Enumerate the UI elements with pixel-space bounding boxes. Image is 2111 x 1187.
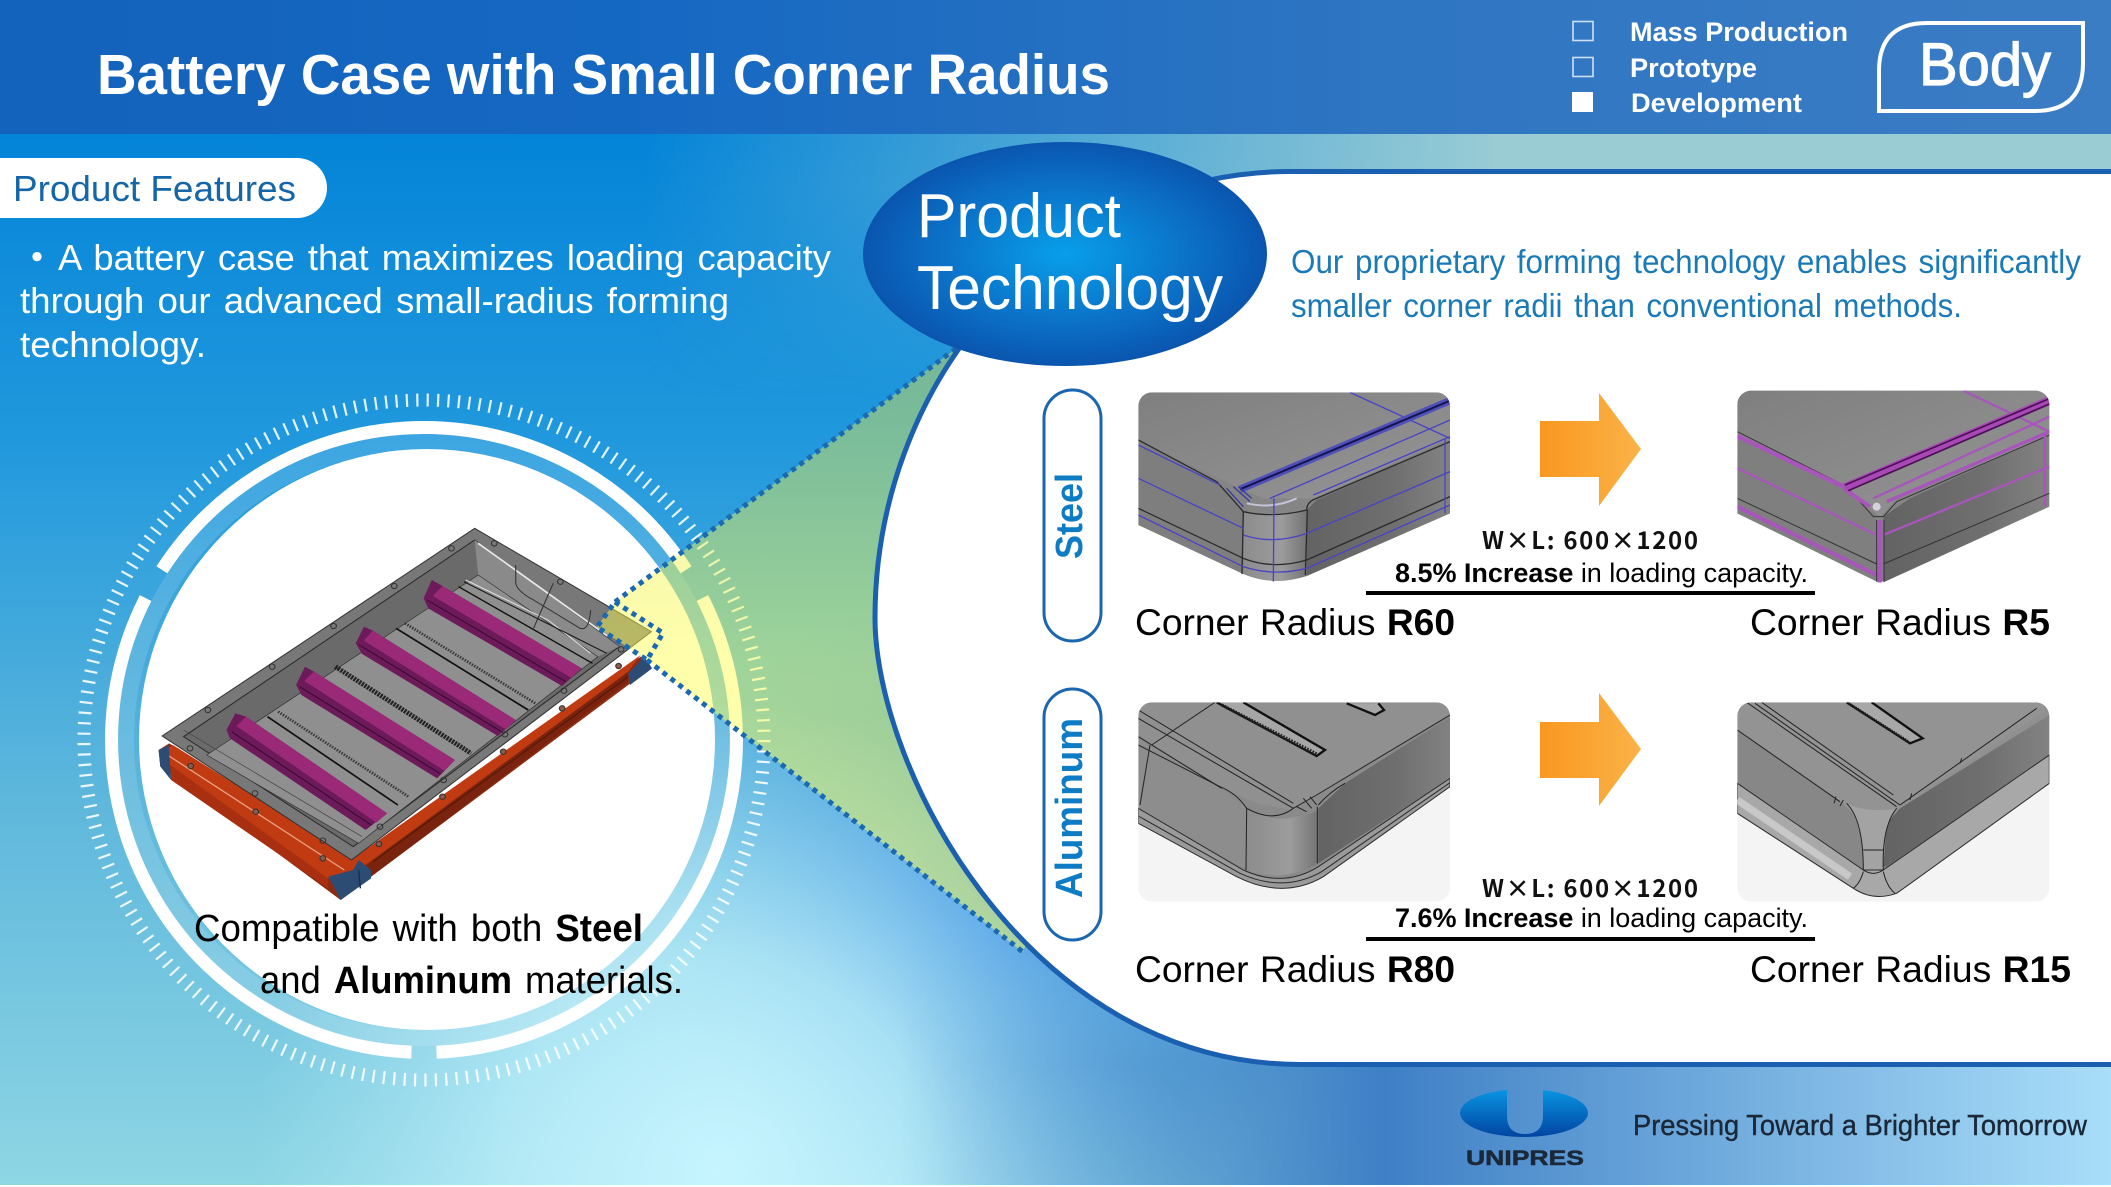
- steel label pill: [1044, 390, 1101, 641]
- zoom callout fan: [597, 347, 1150, 952]
- product technology ellipse heading: Technology: [917, 254, 1223, 323]
- product features description: A battery case that maximizes loading capacity: [58, 237, 831, 278]
- battery case illustration: [159, 528, 652, 900]
- steel radius labels: Corner Radius R60: [1135, 602, 1455, 643]
- technology description: smaller corner radii than conventional methods.: [1291, 287, 1962, 324]
- bolt holes: [187, 541, 624, 861]
- category badge: body: Body: [1919, 31, 2051, 98]
- logo: unipres: UNIPRES: [1466, 1147, 1584, 1170]
- product features description: through our advanced small-radius forming: [20, 280, 729, 321]
- steel radius labels: Corner Radius R5: [1750, 602, 2050, 643]
- panel: product technology: [875, 172, 2111, 1064]
- aluminum callout: 7.6% Increase in loading capacity.: [1395, 903, 1808, 933]
- checkbox: mass production: [1573, 22, 1593, 40]
- steel radius labels: [1135, 602, 2050, 643]
- white disc: [139, 449, 715, 1030]
- label: development: Development: [1631, 88, 1802, 118]
- white segmented ring: [112, 427, 736, 1052]
- header bar: [0, 0, 2111, 134]
- product features description: ・: [19, 237, 55, 278]
- image: steel R5 corner: [1737, 391, 2049, 582]
- aluminum radius labels: [1135, 949, 2071, 990]
- technology description: Our proprietary forming technology enables significantly: [1291, 243, 2081, 280]
- slogan: Pressing Toward a Brighter Tomorrow: [1633, 1110, 2088, 1142]
- image: aluminum R15 corner: [1737, 702, 2049, 902]
- product features pill: Product Features: [13, 168, 296, 209]
- steel callout: W×L: 600×1200: [1482, 521, 1698, 556]
- steel callout: [1366, 521, 1815, 595]
- label: mass production: Mass Production: [1630, 17, 1848, 47]
- product features description: [19, 237, 831, 365]
- technology description: [1291, 243, 2081, 324]
- product technology ellipse heading: [863, 142, 1267, 366]
- steel callout: 8.5% Increase in loading capacity.: [1395, 558, 1808, 588]
- aluminum radius labels: Corner Radius R80: [1135, 949, 1455, 990]
- compatibility caption: [194, 908, 683, 1002]
- title: Battery Case with Small Corner Radius: [97, 43, 1110, 107]
- aluminum radius labels: Corner Radius R15: [1750, 949, 2071, 990]
- checkbox: development (checked): [1572, 92, 1593, 112]
- aluminum callout: [1366, 869, 1815, 941]
- product features pill: [0, 158, 327, 218]
- arrow: aluminum improvement: [1540, 693, 1641, 806]
- aluminum label pill: Aluminum: [1049, 718, 1091, 898]
- inner tinted ring: [126, 442, 722, 1038]
- floor rails: [267, 582, 607, 805]
- steel label pill: Steel: [1049, 473, 1091, 559]
- circular emblem rings: [84, 400, 764, 1080]
- purple cross members: [226, 580, 582, 830]
- tick ring: [84, 400, 764, 1080]
- arrow: steel improvement: [1540, 393, 1641, 506]
- aluminum label pill: [1044, 689, 1101, 940]
- red lower frame: [159, 655, 652, 900]
- flange and tray walls: [162, 528, 651, 860]
- product features description: technology.: [20, 324, 206, 365]
- logo: unipres: [1460, 1088, 1588, 1170]
- category badge: body: [1879, 23, 2083, 111]
- label: prototype: Prototype: [1630, 53, 1757, 83]
- compatibility caption: and Aluminum materials.: [260, 960, 683, 1002]
- image: aluminum R80 corner: [1138, 702, 1450, 902]
- product technology ellipse heading: Product: [917, 182, 1121, 251]
- status legend: [1572, 17, 1848, 118]
- checkbox: prototype: [1573, 58, 1593, 76]
- compatibility caption: Compatible with both Steel: [194, 908, 643, 950]
- image: steel R60 corner: [1138, 392, 1450, 582]
- aluminum callout: W×L: 600×1200: [1482, 869, 1698, 904]
